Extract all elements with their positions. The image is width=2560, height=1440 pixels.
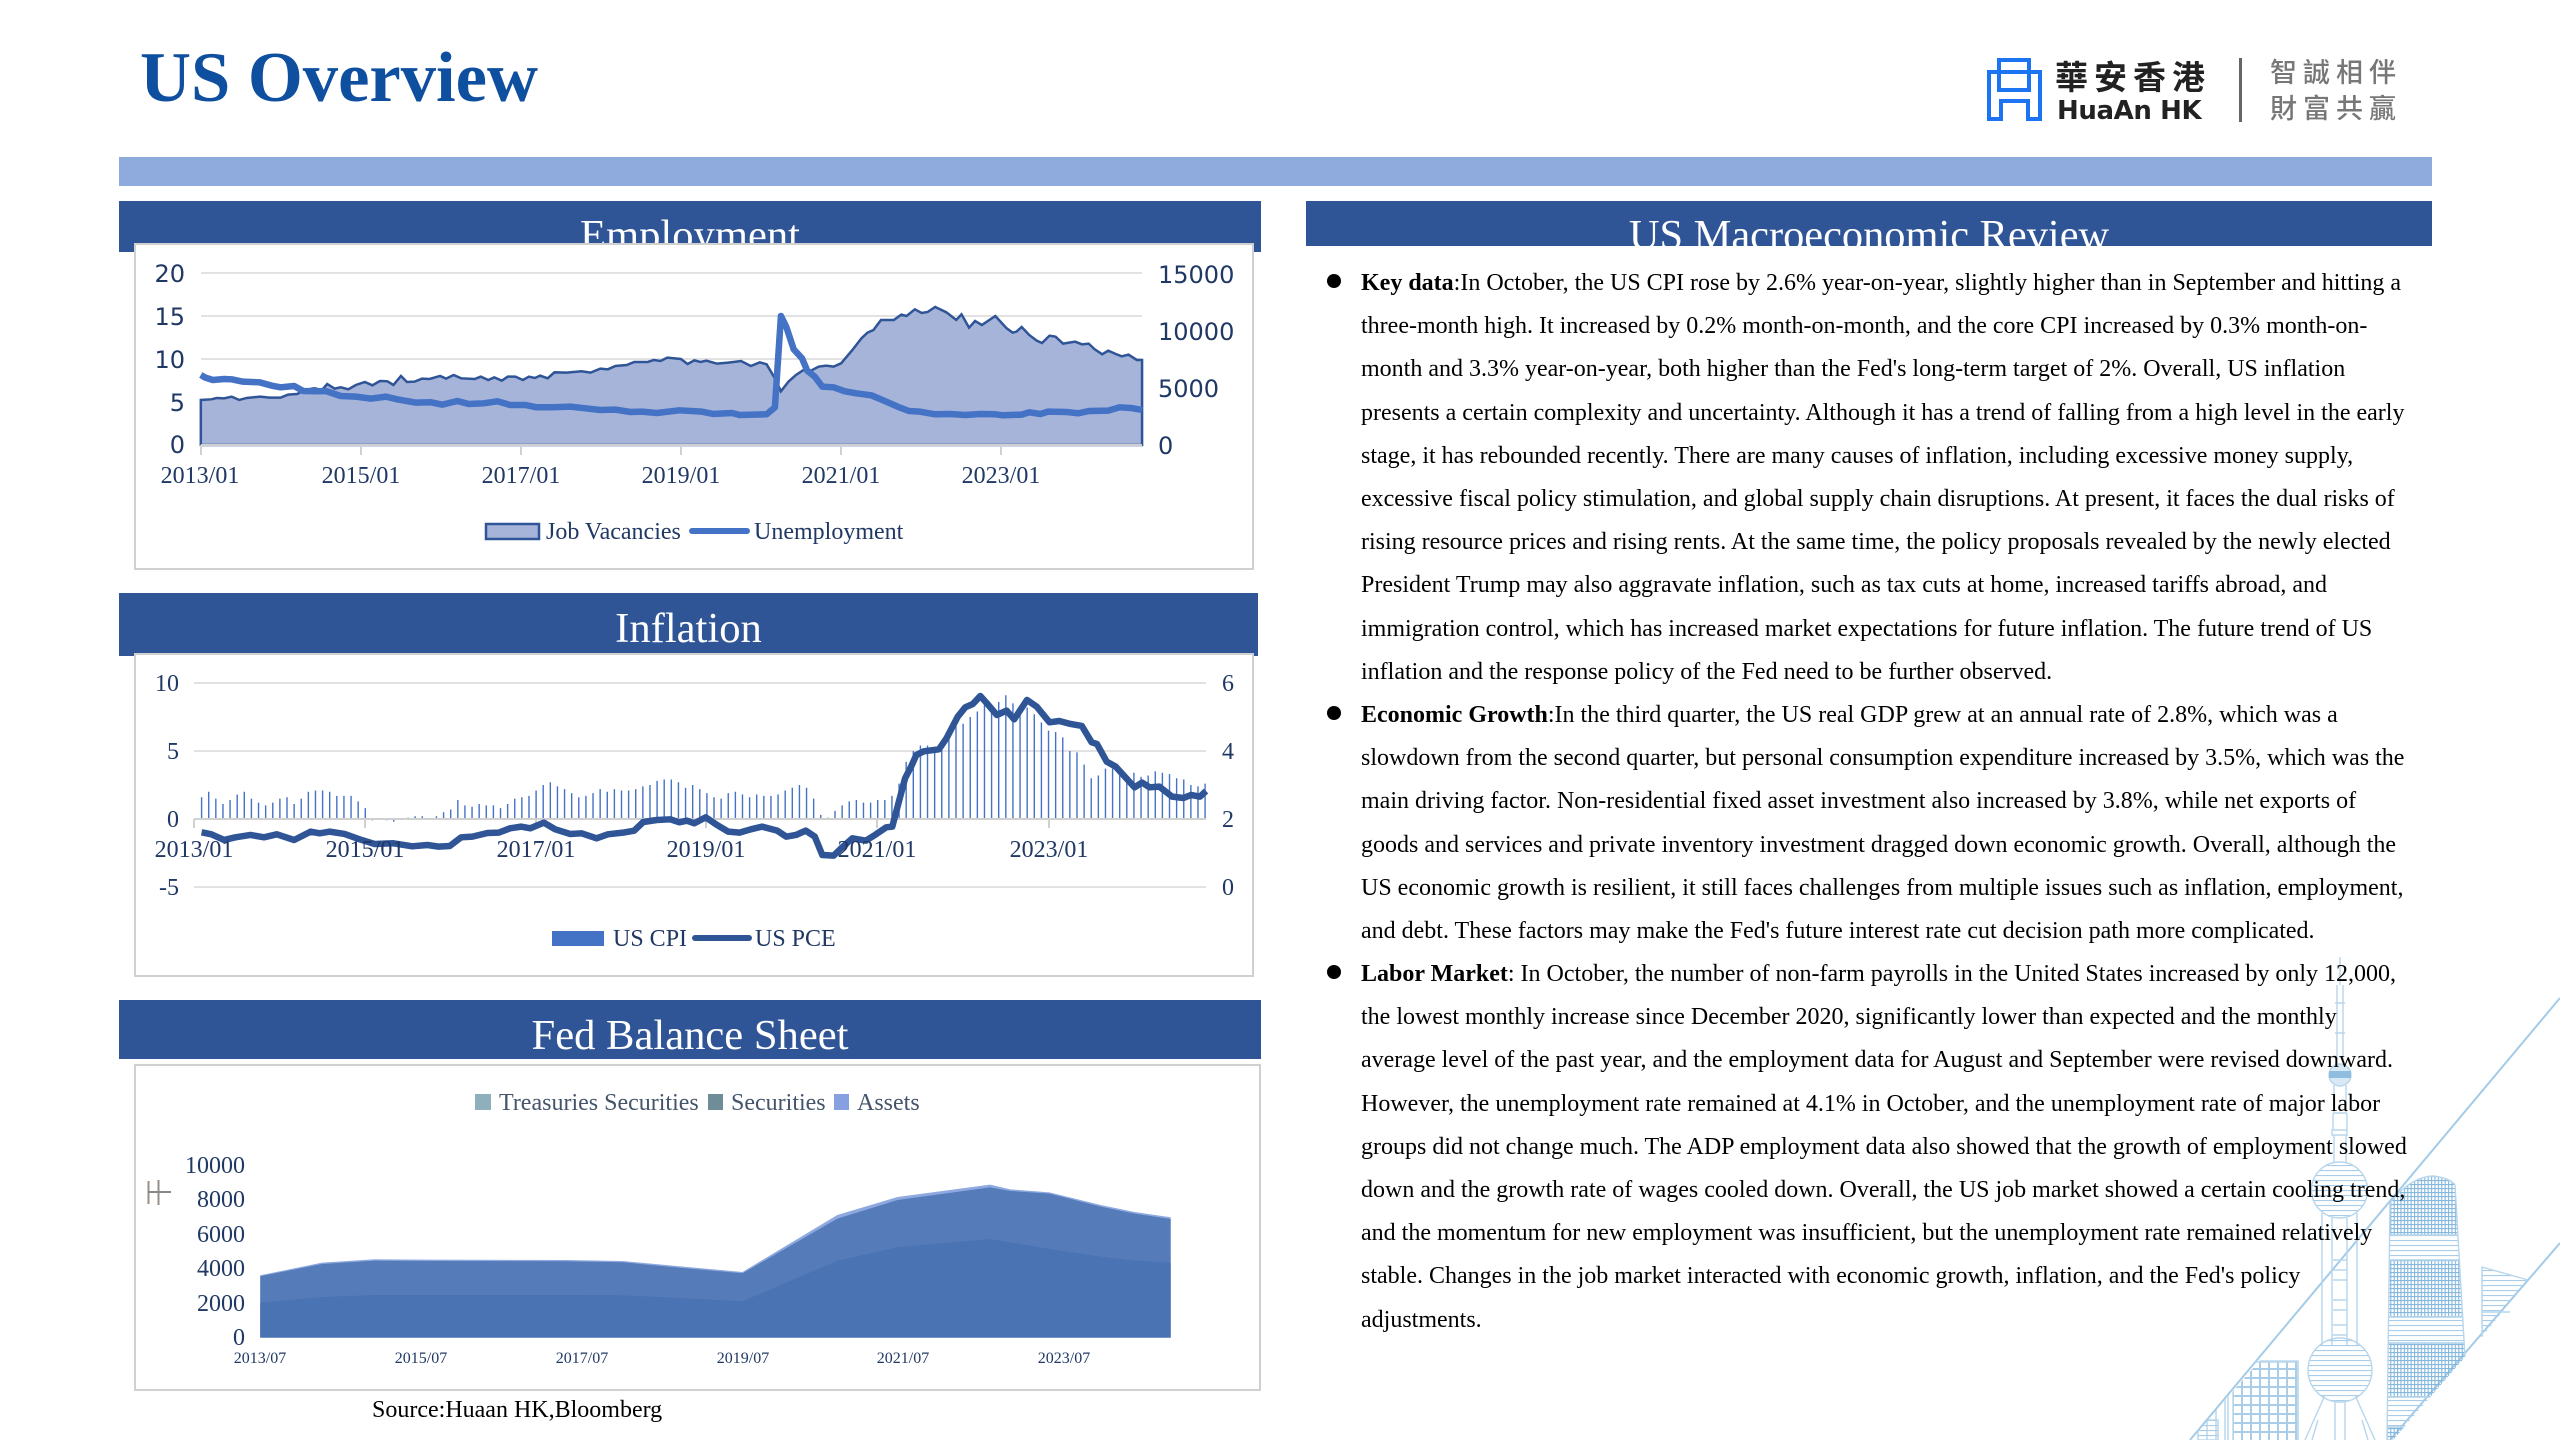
paragraph: key data: inflation and the response policy of the Fed need to be further observed. <box>1361 659 2052 685</box>
paragraph: economic growth <box>1361 702 2404 944</box>
chart: US CPI and US PCE: 6 <box>1222 671 1234 697</box>
chart: US CPI and US PCE: 0 <box>1222 875 1234 901</box>
paragraph: economic growth: US economic growth is resilient, it still faces challenges from multiple issues such as inflation, employment, <box>1361 875 2403 901</box>
paragraph: key data: stage, it has rebounded recently. There are many causes of inflation, including excessive money supply, <box>1361 443 2353 469</box>
chart: fed balance sheet stacked areas: 6000 <box>197 1222 245 1248</box>
chart: US CPI and US PCE <box>134 653 1254 977</box>
chart: US CPI and US PCE: US PCE <box>755 926 836 952</box>
logo slogan <box>2270 51 2402 126</box>
panel: employment <box>119 201 1261 570</box>
paragraph: key data: presents a certain complexity and uncertainty. Although it has a trend of falling from a high level in the early <box>1361 400 2404 426</box>
paragraph: key data: immigration control, which has increased market expectations for future inflation. The future trend of US <box>1361 616 2372 642</box>
bullet: labor market <box>1327 965 1341 979</box>
chart: job vacancies and unemployment: 15 <box>154 303 185 331</box>
chart: US CPI and US PCE: 10 <box>155 671 179 697</box>
paragraph: economic growth: and debt. These factors may make the Fed's future interest rate cut decision path more complicated. <box>1361 918 2315 944</box>
chart: US CPI and US PCE: 4 <box>1222 739 1234 765</box>
logo divider <box>2239 58 2242 122</box>
chart: job vacancies and unemployment: 5 <box>170 389 185 417</box>
icon: logo mark <box>1987 58 2042 121</box>
chart: job vacancies and unemployment: 2017/01 <box>482 463 560 489</box>
heading: inflation <box>119 593 1258 656</box>
chart: job vacancies and unemployment: 2015/01 <box>322 463 400 489</box>
logo latin name: HuaAn HK <box>2057 96 2201 126</box>
paragraph: key data: excessive fiscal policy stimulation, and global supply chain disruptions. At present, it faces the dual risks of <box>1361 486 2395 512</box>
chart: fed balance sheet stacked areas: Treasuries Securities <box>499 1090 699 1116</box>
logo: HuaAn HK <box>1987 51 2402 126</box>
chart: US CPI and US PCE: 2023/01 <box>1010 837 1088 863</box>
chart: fed balance sheet stacked areas: 2021/07 <box>877 1350 929 1367</box>
heading: fed balance sheet: Fed Balance Sheet <box>532 1012 848 1059</box>
source note: Source:Huaan HK,Bloomberg <box>372 1397 662 1423</box>
chart: US CPI and US PCE: 2013/01 <box>155 837 233 863</box>
chart: fed balance sheet stacked areas: Assets <box>857 1090 920 1116</box>
chart: US CPI and US PCE: US CPI <box>613 926 687 952</box>
heading: US macroeconomic review <box>1306 201 2432 246</box>
chart: job vacancies and unemployment: 0 <box>170 431 185 459</box>
paragraph: economic growth: main driving factor. Non-residential fixed asset investment also increased by 3.8%, while net exports of <box>1361 788 2356 814</box>
chart: US CPI and US PCE: 2 <box>1222 807 1234 833</box>
paragraph: labor market: and the momentum for new employment was insufficient, but the unemployment rate remained relatively <box>1361 1220 2372 1246</box>
paragraph: key data <box>1361 270 2404 685</box>
chart: job vacancies and unemployment: 2013/01 <box>161 463 239 489</box>
logo slogan: 財富共贏 <box>2270 87 2402 126</box>
chart: US CPI and US PCE: 2021/01 <box>838 837 916 863</box>
chart: US CPI and US PCE: 2015/01 <box>326 837 404 863</box>
chart: fed balance sheet stacked areas: 2000 <box>197 1291 245 1317</box>
chart: job vacancies and unemployment: 2021/01 <box>802 463 880 489</box>
chart: fed balance sheet stacked areas: 8000 <box>197 1187 245 1213</box>
paragraph: labor market: average level of the past year, and the employment data for August and September were revised downward. <box>1361 1047 2393 1073</box>
chart: job vacancies and unemployment: 5000 <box>1158 375 1219 403</box>
logo slogan: 智誠相伴 <box>2270 51 2402 90</box>
paragraph: key data: President Trump may also aggravate inflation, such as tax cuts at home, increased tariffs abroad, and <box>1361 572 2327 598</box>
logo chinese name: 華安香港 <box>2055 51 2211 99</box>
chart: fed balance sheet stacked areas: 2017/07 <box>556 1350 608 1367</box>
chart: fed balance sheet stacked areas: 2015/07 <box>395 1350 447 1367</box>
paragraph: key data: month and 3.3% year-on-year, both higher than the Fed's long-term target of 2%. Overall, US inflation <box>1361 356 2345 382</box>
text block: macroeconomic review <box>1327 270 2407 1333</box>
paragraph: economic growth: slowdown from the second quarter, but personal consumption expenditure increased by 3.5%, which was the <box>1361 745 2404 771</box>
chart: fed balance sheet stacked areas: 4000 <box>197 1256 245 1282</box>
bullet: key data <box>1327 274 1341 288</box>
chart: fed balance sheet stacked areas: 2013/07 <box>234 1350 286 1367</box>
chart: US CPI and US PCE: -5 <box>159 875 179 901</box>
chart: fed balance sheet stacked areas: 2019/07 <box>717 1350 769 1367</box>
paragraph: labor market: groups did not change much. The ADP employment data also showed that the growth of employment slowed <box>1361 1134 2407 1160</box>
paragraph: key data: rising resource prices and rising rents. At the same time, the policy proposals revealed by the newly elected <box>1361 529 2391 555</box>
chart: US CPI and US PCE: 0 <box>167 807 179 833</box>
chart: job vacancies and unemployment: 2019/01 <box>642 463 720 489</box>
title: US Overview <box>140 39 538 117</box>
chart: job vacancies and unemployment <box>134 243 1254 570</box>
paragraph: labor market <box>1361 961 2407 1333</box>
paragraph: key data: Key data:In October, the US CPI rose by 2.6% year-on-year, slightly higher than in September and hitting a <box>1361 270 2401 296</box>
paragraph: labor market: adjustments. <box>1361 1307 1482 1333</box>
chart: US CPI and US PCE: 5 <box>167 739 179 765</box>
paragraph: labor market: However, the unemployment rate remained at 4.1% in October, and the unemployment rate of major labor <box>1361 1091 2380 1117</box>
chart: job vacancies and unemployment: 0 <box>1158 432 1173 460</box>
chart: fed balance sheet stacked areas: 10000 <box>185 1153 245 1179</box>
chart: job vacancies and unemployment: 2023/01 <box>962 463 1040 489</box>
paragraph: labor market: the lowest monthly increase since December 2020, significantly lower than expected and the monthly <box>1361 1004 2337 1030</box>
paragraph: key data: three-month high. It increased by 0.2% month-on-month, and the core CPI increased by 0.3% month-on- <box>1361 313 2367 339</box>
paragraph: labor market: stable. Changes in the job market interacted with economic growth, inflation, and the Fed's policy <box>1361 1263 2300 1289</box>
paragraph: labor market: down and the growth rate of wages cooled down. Overall, the US job market showed a certain cooling trend, <box>1361 1177 2405 1203</box>
chart: job vacancies and unemployment: 10 <box>154 346 185 374</box>
chart: fed balance sheet stacked areas <box>134 1064 1261 1391</box>
chart: job vacancies and unemployment: Job Vacancies <box>546 519 681 545</box>
paragraph: labor market: Labor Market: In October, the number of non-farm payrolls in the United States increased by only 12,000, <box>1361 961 2396 987</box>
paragraph: economic growth: goods and services and private inventory investment dragged down economic growth. Overall, although the <box>1361 832 2396 858</box>
cityscape watermark <box>2189 957 2560 1440</box>
chart: fed balance sheet stacked areas: Securities <box>731 1090 826 1116</box>
chart: job vacancies and unemployment: 10000 <box>1158 318 1234 346</box>
heading: employment <box>119 201 1261 252</box>
chart: fed balance sheet stacked areas: 2023/07 <box>1038 1350 1090 1367</box>
paragraph: economic growth: Economic Growth:In the third quarter, the US real GDP grew at an annual rate of 2.8%, which was a <box>1361 702 2338 728</box>
chart: US CPI and US PCE: 2019/01 <box>667 837 745 863</box>
top band <box>119 157 2432 186</box>
heading: inflation: Inflation <box>615 605 762 652</box>
heading: fed balance sheet <box>119 1000 1261 1059</box>
chart: job vacancies and unemployment: Unemployment <box>754 519 904 545</box>
panel: inflation <box>119 593 1258 977</box>
bullet: economic growth <box>1327 706 1341 720</box>
panel: fed balance sheet <box>119 1000 1261 1391</box>
chart: fed balance sheet stacked areas: 0 <box>233 1325 245 1351</box>
chart: US CPI and US PCE: 2017/01 <box>497 837 575 863</box>
chart: job vacancies and unemployment: 20 <box>154 260 185 288</box>
chart: job vacancies and unemployment: 15000 <box>1158 261 1234 289</box>
